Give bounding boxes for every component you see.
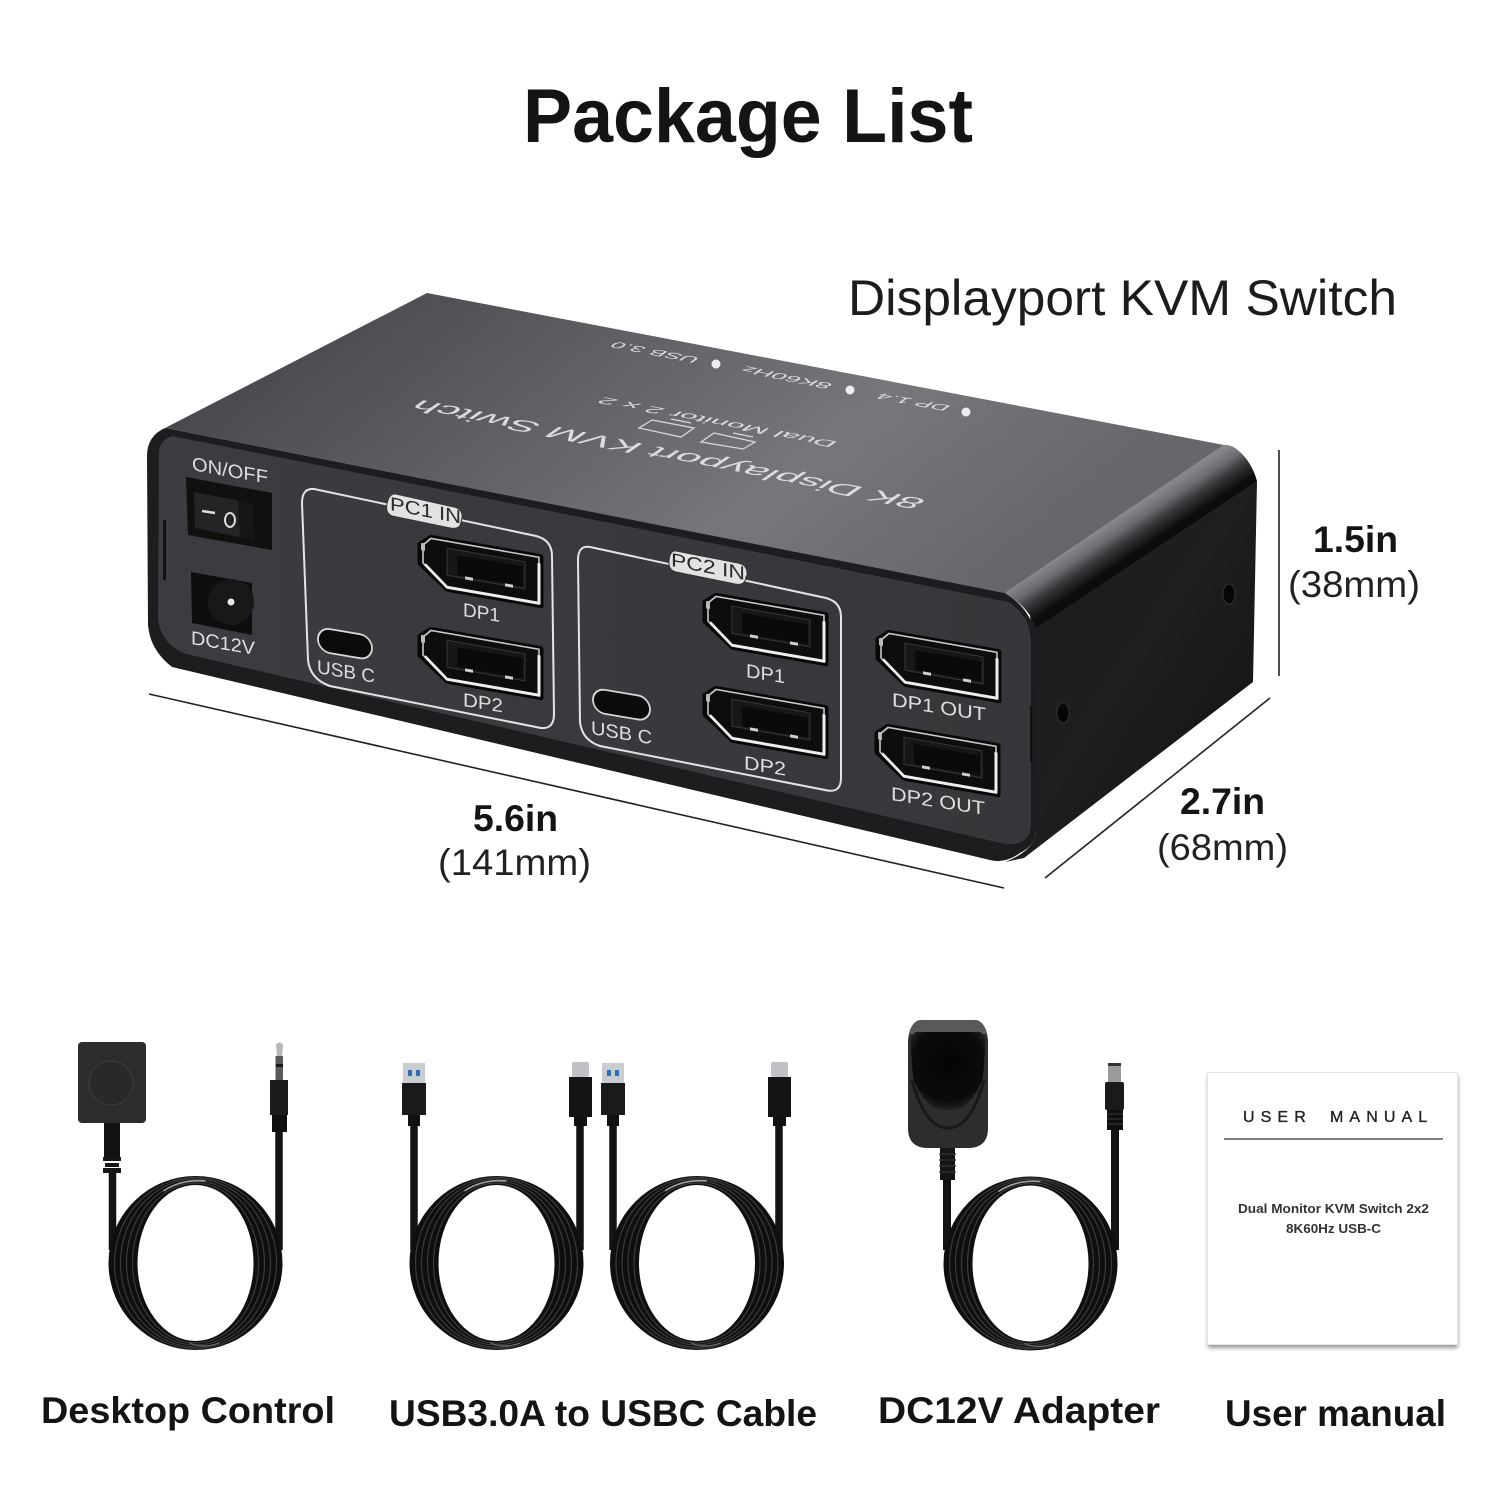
output port: DP2 OUT (877, 724, 998, 795)
top bullet: USB 3.0: USB 3.0 (606, 340, 703, 365)
item: desktop control (78, 1042, 288, 1350)
dimension: width label: 5.6in (473, 798, 558, 839)
top bullet: 8K60Hz (736, 364, 854, 394)
panel: KVM switch device (147, 293, 1257, 862)
manual title: MANUAL (1330, 1109, 1433, 1126)
PC2 label text: PC2 IN (671, 550, 745, 585)
icon: rocker switch (186, 477, 272, 550)
PC1 DP2 port (420, 627, 541, 698)
cable runs (947, 1128, 1115, 1250)
top bullet: 8K60Hz: 8K60Hz (736, 364, 836, 391)
PC1 USB-C label: USB C (317, 657, 375, 688)
control puck (78, 1042, 146, 1173)
manual subtitle: Dual Monitor KVM Switch 2x2 (1238, 1201, 1429, 1216)
USB-C plug (569, 1062, 592, 1126)
icon: DC power jack (191, 572, 254, 635)
label: DP1 OUT: DP1 OUT (892, 690, 986, 726)
right side of device (1005, 481, 1257, 862)
dimension: height label: 1.5in (1313, 519, 1398, 560)
power switch label: ON/OFF (192, 454, 268, 489)
panel: PC2 IN (578, 547, 841, 791)
dimension: width label (438, 798, 591, 883)
device front panel (158, 436, 1031, 844)
device front frame (147, 428, 1036, 861)
screw: upper (1223, 584, 1235, 604)
manual page (1208, 1072, 1458, 1344)
PC2 USB-C port (593, 688, 650, 722)
top label: product name: 8K Displayport KVM Switch (404, 396, 933, 512)
right side notch (1030, 706, 1032, 762)
item: DC12V adapter (908, 1020, 1124, 1350)
icon: monitor left (639, 419, 694, 437)
left side notch (163, 520, 166, 580)
panel: PC1 IN (302, 489, 554, 728)
top bullet: USB 3.0 (606, 340, 720, 368)
item: USB cable 1 (402, 1062, 592, 1350)
DC barrel plug (1105, 1063, 1124, 1130)
cable coil (610, 1176, 784, 1350)
label: DP2 OUT: DP2 OUT (891, 784, 985, 820)
top face of device (165, 293, 1224, 593)
PC2 USB-C label: USB C (591, 718, 652, 749)
item: USB cable 2 (601, 1062, 791, 1350)
dimension: width label: (141mm) (438, 842, 591, 883)
dimension: height label: (38mm) (1288, 564, 1420, 605)
top label: dual monitor: Dual Monitor 2 x 2 (592, 395, 841, 449)
cable runs (414, 1120, 580, 1250)
USB-A plug (402, 1063, 426, 1126)
PC2 DP1 label: DP1 (746, 661, 785, 688)
device edge chamfer (1005, 445, 1257, 628)
screw: lower (1057, 703, 1069, 723)
label: user manual: User manual (1225, 1393, 1446, 1434)
PC2 DP2 label: DP2 (744, 753, 786, 781)
cable runs (112, 1130, 279, 1250)
item: user manual (1208, 1072, 1458, 1348)
PC1 USB-C port (318, 627, 372, 660)
manual title: USER (1243, 1109, 1312, 1126)
PC1 DP1 label: DP1 (463, 600, 500, 627)
top bullet: DP 1.4: DP 1.4 (872, 391, 954, 413)
cable runs (613, 1120, 779, 1250)
dimension line: height (1278, 450, 1280, 676)
adapter body (908, 1020, 988, 1180)
dimension: height label (1288, 519, 1420, 605)
audio jack (270, 1042, 288, 1132)
PC1 label pill (387, 494, 462, 528)
dimension: depth label (1157, 781, 1288, 868)
cable coil (410, 1176, 584, 1350)
product name heading: Displayport KVM Switch (848, 270, 1397, 326)
DC label: DC12V (191, 628, 255, 660)
output port: DP1 OUT (878, 630, 999, 701)
USB-A plug (601, 1063, 625, 1126)
dimension: depth label: 2.7in (1180, 781, 1265, 822)
manual rule (1224, 1138, 1443, 1140)
cable coil (108, 1176, 282, 1350)
USB-C plug (768, 1062, 791, 1126)
icon: monitor right (701, 433, 755, 449)
PC1 DP2 label: DP2 (463, 690, 503, 717)
manual subtitle line two: 8K60Hz USB-C (1286, 1221, 1382, 1236)
label: DC12V adapter: DC12V Adapter (878, 1390, 1160, 1431)
top bullet: DP 1.4 (872, 391, 970, 416)
PC1 DP1 port (420, 535, 541, 606)
dimension line: width (149, 694, 1004, 888)
dimension line: depth (1045, 698, 1270, 878)
label: USB cable: USB3.0A to USBC Cable (389, 1393, 817, 1434)
PC2 DP2 port (705, 686, 826, 757)
label: desktop control: Desktop Control (41, 1390, 335, 1431)
title: Package List (523, 74, 973, 159)
dimension: depth label: (68mm) (1157, 827, 1288, 868)
cable coil (944, 1176, 1118, 1350)
manual shadow (1208, 1076, 1458, 1348)
PC2 label pill (669, 551, 747, 584)
PC1 label text: PC1 IN (390, 494, 461, 528)
PC2 DP1 port (705, 593, 826, 664)
